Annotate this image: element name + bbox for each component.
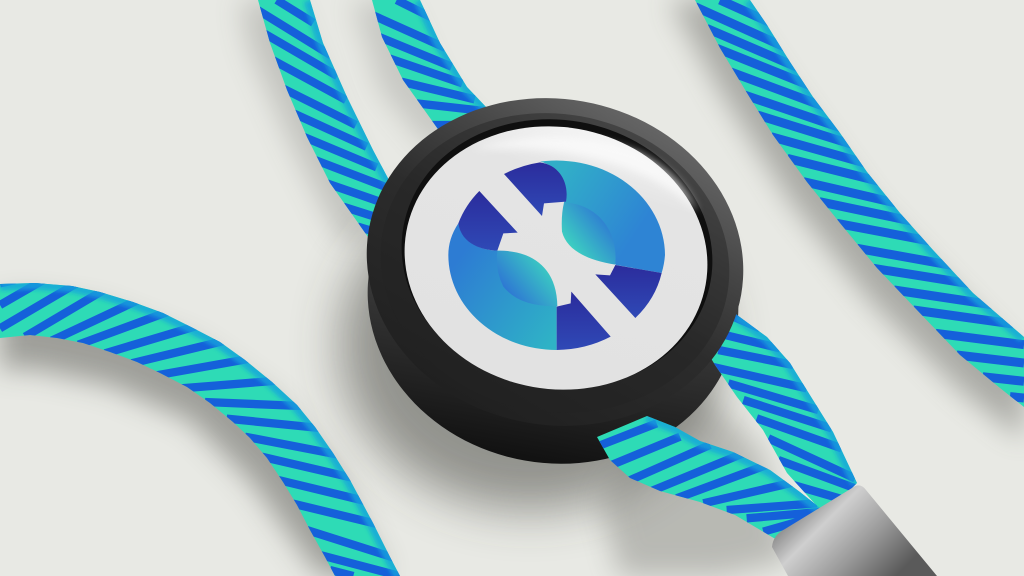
rope: bottom left	[0, 280, 402, 576]
logo: upper blue arc	[540, 161, 665, 273]
logo: upper teardrop	[562, 203, 616, 265]
dome face	[384, 103, 728, 413]
rope: upper right	[690, 0, 1024, 410]
logo: lower blue arc	[448, 223, 557, 350]
logo	[448, 161, 665, 350]
logo: dark lower segment	[557, 292, 611, 350]
logo: dark right segment	[595, 265, 662, 318]
logo: dark left segment	[458, 191, 518, 251]
metal ferrule	[772, 485, 937, 576]
rope: right strand into ferrule	[712, 314, 857, 508]
rope: top left	[258, 0, 388, 237]
button body side	[342, 107, 764, 493]
rope: top middle	[372, 0, 486, 129]
dome highlight	[470, 136, 698, 212]
logo: dark upper segment	[504, 162, 567, 216]
logo: lower teardrop	[497, 251, 557, 306]
button rim	[341, 69, 769, 455]
rope: lower strand into ferrule	[597, 416, 820, 538]
rim inner groove	[380, 95, 734, 413]
